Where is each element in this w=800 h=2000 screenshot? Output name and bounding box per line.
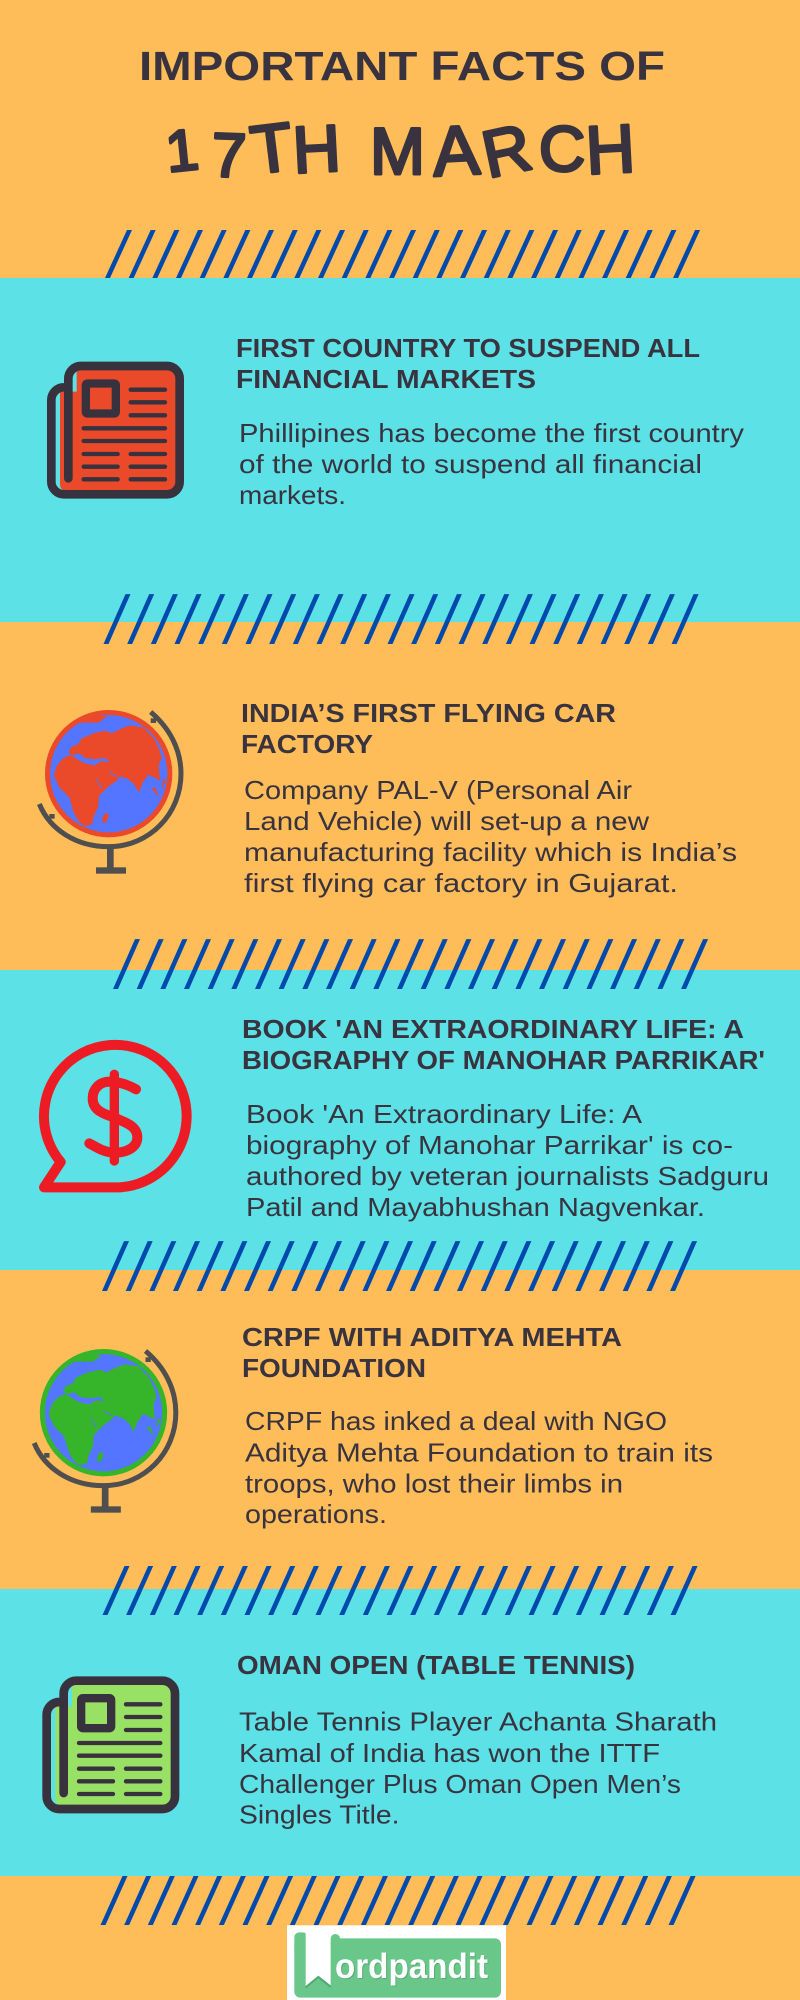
body text: CRPF has inked a deal with NGO [245,1406,667,1436]
body text: Land Vehicle) will set-up a new [244,806,649,836]
logo: wordpandit [287,1925,506,2000]
body text: Company PAL-V (Personal Air [244,775,632,805]
body text: first flying car factory in Gujarat. [244,868,678,898]
logo: wordpandit: ordpandit [335,1947,488,1986]
header panel [0,0,800,278]
body text: Table Tennis Player Achanta Sharath [239,1706,717,1736]
body text [239,1706,717,1830]
heading: CRPF WITH ADITYA MEHTA [242,1322,622,1352]
body text: Book 'An Extraordinary Life: A [246,1099,643,1129]
title: 17th march: H [584,111,637,189]
heading [236,333,700,394]
title: 17th march: A [431,111,482,191]
body text: troops, who lost their limbs in [245,1468,623,1498]
heading: OMAN OPEN (TABLE TENNIS) [237,1650,635,1680]
heading [242,1322,622,1383]
body text: manufacturing facility which is India’s [244,837,737,867]
title: 17th march: H [291,111,342,187]
heading [241,698,616,759]
hatch divider 3 [113,939,708,989]
title: important facts of: IMPORTANT FACTS OF [139,43,665,89]
icon: red newspaper [51,366,180,494]
body text: Singles Title. [239,1800,400,1830]
body text: of the world to suspend all financial [239,449,702,479]
body text: markets. [239,480,346,510]
body text [246,1099,769,1222]
title: 17th march: M [370,114,425,188]
body text: Kamal of India has won the ITTF [239,1738,660,1768]
hatch divider 2 [104,594,699,644]
body text: biography of Manohar Parrikar' is co- [246,1130,733,1160]
body text: Challenger Plus Oman Open Men’s [239,1769,681,1799]
body text: Phillipines has become the first country [239,418,744,448]
panel: crpf foundation [0,1270,800,1589]
body text: Patil and Mayabhushan Nagvenkar. [246,1192,705,1222]
hatch divider 4 [102,1241,697,1291]
heading [242,1014,765,1075]
body text [245,1406,713,1529]
title: 17th march: T [247,108,297,189]
heading: FACTORY [241,729,373,759]
body text: operations. [245,1499,387,1529]
heading: BOOK 'AN EXTRAORDINARY LIFE: A [242,1014,744,1044]
title: 17th march: C [539,113,585,185]
body text [244,775,737,898]
heading: INDIA’S FIRST FLYING CAR [241,698,616,728]
heading: FIRST COUNTRY TO SUSPEND ALL [236,333,700,363]
body text [239,418,744,510]
body text: authored by veteran journalists Sadguru [246,1161,769,1191]
footer panel [0,1876,800,2000]
heading: FOUNDATION [242,1353,426,1383]
heading: FINANCIAL MARKETS [236,364,536,394]
panel: first country to suspend [0,278,800,622]
panel: flying car factory [0,622,800,970]
hatch divider 1 [105,230,700,278]
icon: green newspaper [47,1681,175,1809]
hatch divider 6 [100,1876,696,1925]
title: 17th march: R [476,109,538,192]
panel: book biography [0,970,800,1270]
heading: BIOGRAPHY OF MANOHAR PARRIKAR' [242,1045,765,1075]
hatch divider 5 [102,1566,698,1615]
title: 17th march: 1 [163,117,201,185]
icon: red globe [39,710,181,874]
title: 17th march: 7 [211,121,247,191]
icon: green globe [34,1349,176,1513]
body text: Aditya Mehta Foundation to train its [245,1438,713,1468]
icon: dollar speech bubble [44,1045,187,1187]
panel: oman open [0,1589,800,1876]
